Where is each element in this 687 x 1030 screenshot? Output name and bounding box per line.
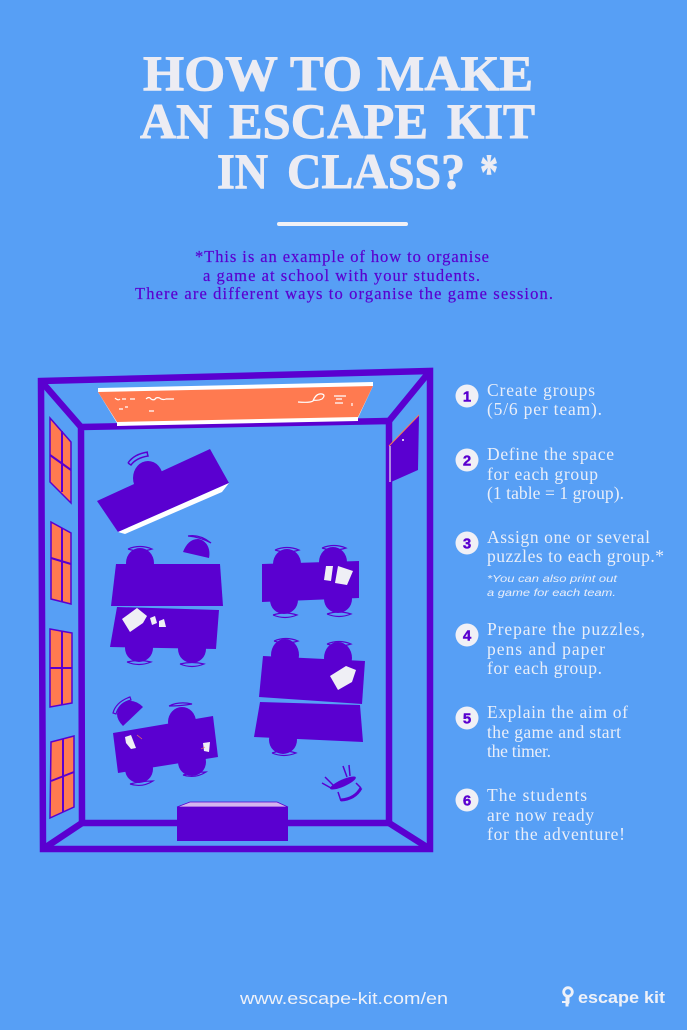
step 4: for each group.: [487, 658, 602, 678]
step 3: Assign one or several: [487, 527, 650, 547]
teacher table bottom: [177, 802, 288, 841]
step 3: [456, 527, 664, 599]
step 4: 4: [463, 628, 472, 644]
title: [140, 45, 535, 199]
step 6: The students: [487, 785, 587, 805]
step 1: 1: [463, 388, 471, 406]
logo: escape kit: [578, 988, 665, 1007]
group table 3: [254, 638, 365, 756]
step 2: [456, 444, 624, 503]
windows: [50, 418, 74, 818]
step 2: 2: [463, 452, 471, 470]
title: HOW: [143, 45, 278, 101]
group table 1: [110, 536, 223, 666]
step 2: for each group: [487, 464, 598, 484]
teacher desk with chair: [97, 449, 229, 534]
subtitle: *This is an example of how to organise: [195, 247, 489, 266]
subtitle: There are different ways to organise the game session.: [135, 284, 553, 303]
fallen chair: [322, 765, 361, 801]
step 3: puzzles to each group.*: [487, 546, 664, 566]
title: CLASS?: [287, 143, 465, 199]
step 3: 3: [463, 536, 471, 552]
title: IN: [217, 143, 268, 199]
step 5: the timer.: [487, 741, 551, 761]
step 2: Define the space: [487, 444, 614, 464]
website url: www.escape-kit.com/en: [239, 989, 448, 1008]
group table 2: [262, 546, 359, 618]
title: AN: [140, 93, 212, 149]
step 6: [456, 785, 625, 844]
step 6: for the adventure!: [487, 824, 625, 844]
step 5: Explain the aim of: [487, 702, 628, 722]
title: TO: [290, 45, 362, 101]
subtitle: [135, 247, 553, 303]
step 1: [456, 380, 602, 419]
subtitle: a game at school with your students.: [203, 266, 480, 285]
door: [389, 415, 419, 482]
steps list: [456, 380, 664, 844]
title: KIT: [447, 93, 535, 149]
step 3: *You can also print out: [487, 573, 618, 585]
step 4: [456, 619, 645, 678]
group table 4: [113, 697, 218, 785]
title: MAKE: [377, 45, 533, 101]
title: ESCAPE: [229, 93, 428, 149]
title: *: [480, 143, 498, 199]
step 5: the game and start: [487, 722, 621, 742]
room walls: [41, 371, 430, 849]
step 1: (5/6 per team).: [487, 399, 602, 419]
icon: key: [562, 988, 572, 1006]
step 2: (1 table = 1 group).: [487, 483, 624, 503]
blackboard: [98, 382, 373, 426]
step 1: Create groups: [487, 380, 595, 400]
step 6: 6: [463, 792, 471, 810]
classroom illustration: [41, 371, 430, 849]
step 4: pens and paper: [487, 639, 605, 659]
step 3: a game for each team.: [487, 587, 616, 599]
step 5: [456, 702, 628, 761]
step 5: 5: [463, 710, 471, 728]
step 4: Prepare the puzzles,: [487, 619, 645, 639]
step 6: are now ready: [487, 805, 594, 825]
